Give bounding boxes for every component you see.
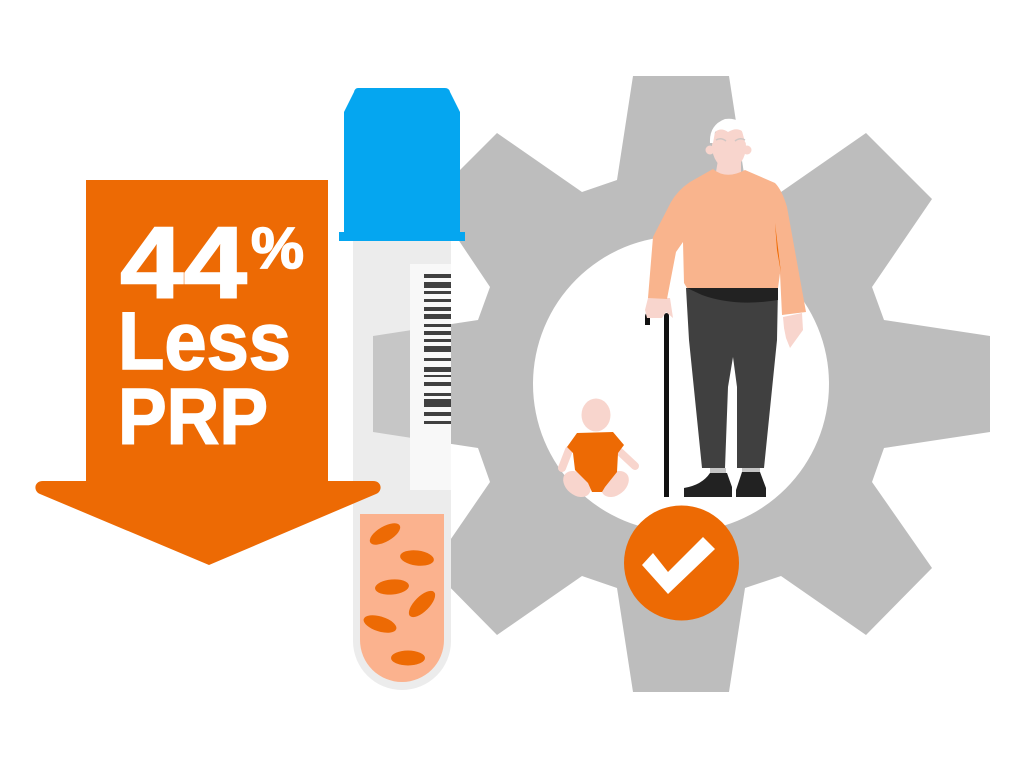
sweater shadow — [775, 223, 781, 273]
arrow text — [118, 206, 304, 461]
PRP: PRP — [118, 372, 268, 461]
down arrow — [35, 180, 381, 565]
tube body — [353, 238, 451, 690]
icon: gear — [373, 76, 990, 692]
check mark — [642, 537, 715, 594]
baby head — [582, 398, 610, 432]
sweater — [648, 169, 806, 315]
cane — [645, 312, 669, 497]
socks — [710, 468, 760, 473]
right hand — [783, 313, 803, 348]
tube label — [410, 264, 451, 490]
gear tooth seen through tube — [373, 330, 412, 438]
test tube — [339, 88, 465, 690]
percent sign: % — [251, 216, 304, 281]
eyebrows — [716, 139, 745, 141]
percentage: 44 — [120, 206, 247, 320]
blood sample — [360, 514, 444, 682]
blood cells — [362, 519, 439, 666]
barcode — [424, 274, 451, 424]
less: Less — [118, 296, 291, 387]
baby — [558, 398, 635, 502]
elderly man — [645, 119, 806, 497]
baby onesie — [567, 432, 624, 492]
hair — [710, 119, 748, 145]
left hand — [645, 298, 673, 318]
ears, neck and head — [706, 123, 752, 178]
shoes — [684, 472, 766, 497]
baby limbs — [558, 450, 635, 502]
check badge — [624, 506, 739, 620]
tube cap — [339, 88, 465, 241]
belt shadow — [687, 288, 778, 303]
badge circle — [624, 506, 739, 620]
trousers — [686, 288, 778, 468]
